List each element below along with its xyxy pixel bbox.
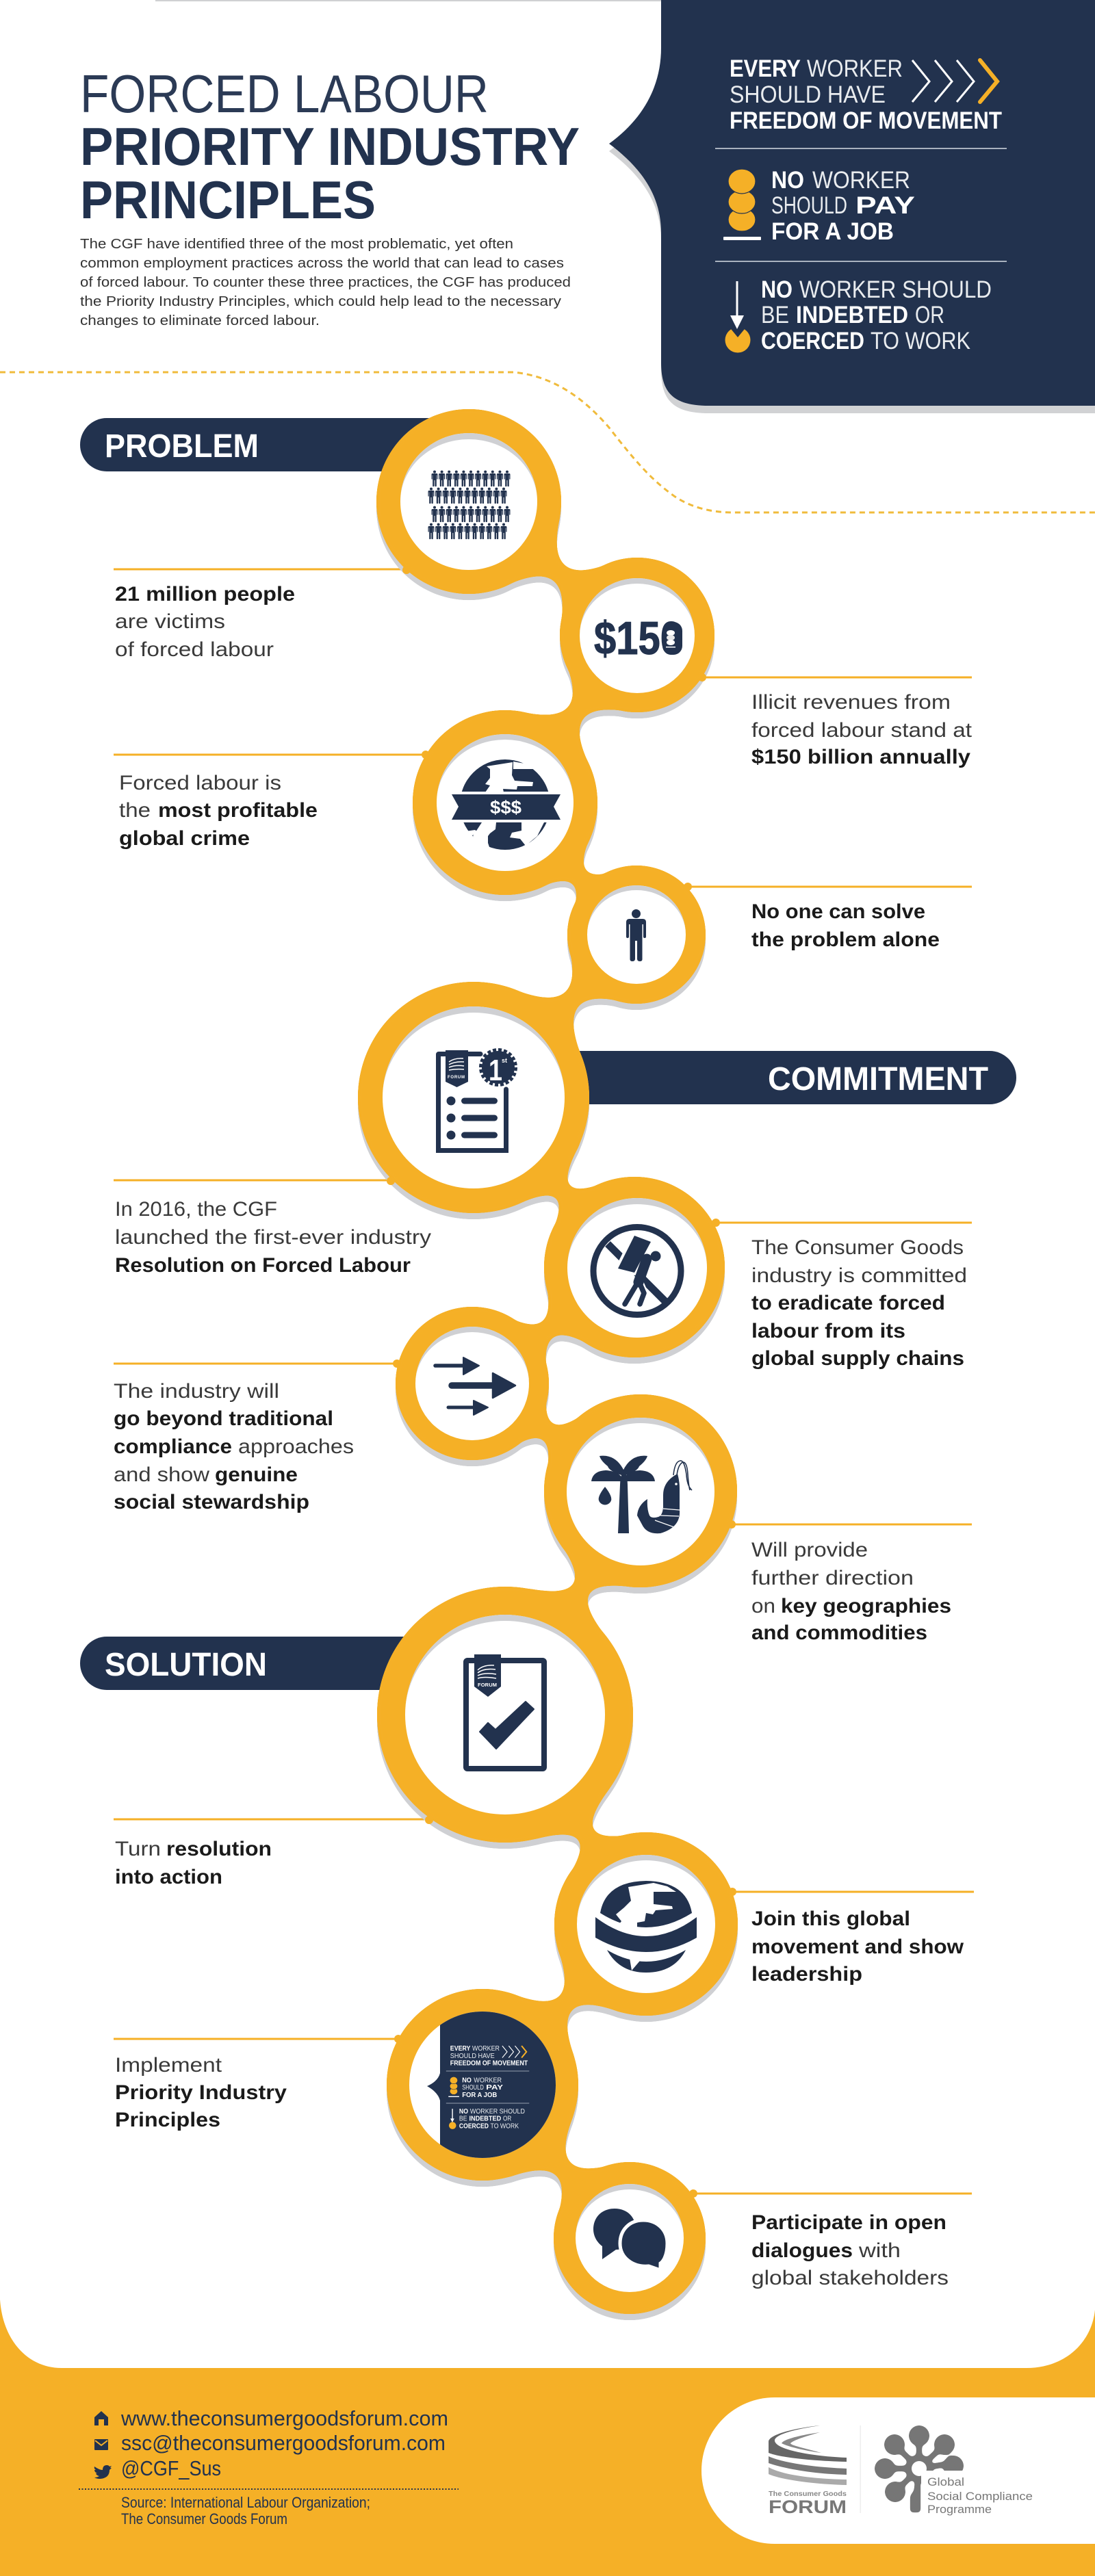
icon: miniature principles panel: FREEDOM OF MOVEMENT <box>450 2060 528 2068</box>
text: no one alone: No one can solve <box>751 900 925 923</box>
icon: miniature principles panel: NO <box>459 2108 468 2116</box>
principle: no debt: OR <box>915 302 944 328</box>
title: PRINCIPLES <box>80 170 376 230</box>
title: PRIORITY INDUSTRY <box>80 116 580 177</box>
principle: no debt: TO WORK <box>871 328 970 354</box>
text: turn resolution <box>115 1838 272 1888</box>
contact details: ssc@theconsumergoodsforum.com <box>121 2431 446 2455</box>
banner: commitment: COMMITMENT <box>768 1061 988 1097</box>
text: beyond compliance: approaches <box>238 1435 354 1458</box>
text: 2016 resolution: launched the first-ever industry <box>115 1226 431 1249</box>
text: 21 million people <box>115 583 295 661</box>
circle: open dialogues <box>576 2184 684 2292</box>
text: 21 million people: 21 million people <box>115 583 295 606</box>
text: global movement: leadership <box>751 1963 862 1986</box>
text: geographies <box>751 1539 951 1644</box>
icon: clipboard with check mark: FORUM <box>478 1682 497 1688</box>
icon: resolution document with first badge: FORUM <box>448 1076 465 1080</box>
circle: eradicate forced labour <box>567 1198 707 1338</box>
icon: miniature principles panel: SHOULD <box>462 2084 484 2092</box>
icon: miniature principles panel: OR <box>503 2116 511 2123</box>
text: 21 million people: are victims <box>115 610 225 633</box>
text: profitable crime: global crime <box>119 827 250 850</box>
principle: no debt: INDEBTED <box>796 302 908 328</box>
logo: global social compliance programme: Social Compliance <box>927 2490 1033 2503</box>
text: dialogues <box>751 2211 949 2289</box>
principle: no fees: WORKER <box>812 167 910 194</box>
banner: solution <box>80 1637 511 1690</box>
text: global movement: Join this global <box>751 1908 910 1930</box>
text: illicit revenues: Illicit revenues from <box>751 691 951 714</box>
text: profitable crime: most profitable <box>158 799 318 822</box>
text: illicit revenues <box>751 691 972 768</box>
source note <box>121 2494 370 2527</box>
logo: the consumer goods forum <box>769 2425 847 2517</box>
principle: freedom of movement <box>730 55 1002 134</box>
connector tick lines <box>114 569 974 2194</box>
principle: freedom of movement: FREEDOM OF MOVEMENT <box>730 107 1002 134</box>
panel shadow <box>609 8 1095 413</box>
text: geographies: Will provide <box>751 1539 868 1561</box>
circle: resolution document <box>383 1006 565 1188</box>
icon: $150 with coins: $150 <box>594 612 682 664</box>
text: implement: Principles <box>115 2109 220 2131</box>
text: turn resolution: into action <box>115 1866 222 1888</box>
text: implement <box>115 2054 287 2131</box>
icon: miniature principles panel: INDEBTED <box>469 2116 501 2123</box>
icon: miniature principles panel: BE <box>459 2116 467 2123</box>
icon: globe with money ribbon <box>452 759 561 850</box>
circle: no one alone <box>587 885 686 984</box>
panel background <box>609 0 1095 406</box>
principle: no fees: SHOULD <box>771 192 847 219</box>
text: eradicate: to eradicate forced <box>751 1292 945 1314</box>
intro paragraph: of forced labour. To counter these three practices, the CGF has produced <box>80 275 571 290</box>
icon: globe with band <box>595 1881 697 1973</box>
icon: miniature principles panel: FOR A JOB <box>462 2092 497 2099</box>
circle: geographies and commodities <box>567 1418 714 1565</box>
text: geographies: key geographies <box>781 1595 951 1617</box>
top edge line <box>155 0 661 1</box>
logo: the consumer goods forum: FORUM <box>769 2497 847 2517</box>
principle: no debt: BE <box>761 302 789 328</box>
icon: resolution document with first badge <box>438 1050 516 1151</box>
text: beyond compliance: social stewardship <box>114 1491 309 1513</box>
tick junction dots <box>387 566 736 2198</box>
footer <box>0 2300 1095 2576</box>
circle: profitable crime globe <box>437 734 574 871</box>
dashed route line <box>0 372 1095 512</box>
icon: miniature principles panel: WORKER <box>472 2045 500 2053</box>
contact details: www.theconsumergoodsforum.com <box>120 2406 448 2430</box>
principle: no fees: PAY <box>855 192 915 219</box>
logo: the consumer goods forum: The Consumer Goods <box>769 2490 847 2498</box>
principle: no debt: COERCED <box>761 328 864 354</box>
icon: clipboard with check mark <box>466 1654 544 1769</box>
principle: no fees <box>723 167 915 245</box>
icon: resolution document with first badge: 1 <box>489 1054 502 1087</box>
yellow chain of circles <box>358 409 738 2314</box>
text: turn resolution: resolution <box>166 1838 272 1860</box>
text: profitable crime: Forced labour is <box>119 772 281 794</box>
circle: global movement <box>577 1855 715 1993</box>
text: eradicate: The Consumer Goods <box>751 1236 964 1259</box>
icon: globe with money ribbon: $$$ <box>490 797 521 818</box>
logo: global social compliance programme: Programme <box>927 2503 992 2516</box>
text: profitable crime <box>119 772 318 850</box>
icon: prohibited forced labour <box>593 1227 681 1315</box>
principle: no fees: NO <box>771 167 804 194</box>
icon: miniature principles panel <box>427 2012 556 2158</box>
icon: miniature principles panel: TO WORK <box>491 2122 519 2130</box>
text: illicit revenues: forced labour stand at <box>751 719 972 742</box>
text: beyond compliance <box>114 1380 354 1513</box>
principle: freedom of movement: EVERY <box>730 55 801 82</box>
logo panel <box>701 2397 1095 2544</box>
icon: bird <box>94 2465 112 2479</box>
text: 2016 resolution: Resolution on Forced Labour <box>115 1254 411 1277</box>
banner: problem <box>80 418 477 471</box>
text: beyond compliance: genuine <box>215 1463 298 1486</box>
icon: miniature principles panel: WORKER <box>474 2077 502 2084</box>
text: no one alone <box>751 900 940 951</box>
chain shadow <box>358 415 738 2320</box>
principle: no fees: FOR A JOB <box>771 218 894 245</box>
contact details <box>79 2406 459 2527</box>
footer background <box>0 2300 1095 2576</box>
icon: resolution document with first badge: st <box>502 1057 507 1064</box>
intro paragraph <box>80 237 571 328</box>
logo: global social compliance programme <box>875 2425 1033 2516</box>
text: no one alone: the problem alone <box>751 928 940 951</box>
text: implement: Implement <box>115 2054 222 2077</box>
text: eradicate <box>751 1236 967 1370</box>
text: 2016 resolution <box>115 1198 431 1277</box>
text: implement: Priority Industry <box>115 2081 287 2104</box>
intro paragraph: the Priority Industry Principles, which could help lead to the necessary <box>80 294 561 309</box>
text: illicit revenues: $150 billion annually <box>751 746 970 768</box>
text: profitable crime: the <box>119 799 151 822</box>
icon: miniature principles panel: NO <box>462 2077 472 2084</box>
panel: three principles <box>609 0 1095 413</box>
contact details: @CGF_Sus <box>121 2456 221 2480</box>
circle: 21 million people <box>400 433 537 570</box>
banner: problem: PROBLEM <box>105 428 259 465</box>
text: 2016 resolution: In 2016, the CGF <box>115 1198 277 1221</box>
text: beyond compliance: and show <box>114 1463 209 1486</box>
principle: no debt: NO <box>761 276 793 303</box>
principle: no debt: WORKER SHOULD <box>799 276 992 303</box>
text: dialogues: dialogues <box>751 2239 853 2262</box>
text: turn resolution: Turn <box>115 1838 161 1860</box>
text: dialogues: Participate in open <box>751 2211 946 2234</box>
source note: The Consumer Goods Forum <box>121 2510 287 2527</box>
text: 21 million people: of forced labour <box>115 638 274 661</box>
text: beyond compliance: compliance <box>114 1435 232 1458</box>
text: eradicate: global supply chains <box>751 1347 964 1370</box>
text: dialogues: with <box>858 2239 901 2262</box>
circle: priority industry principles <box>409 2012 556 2158</box>
principle: no debt <box>725 276 992 354</box>
icon: mail <box>94 2439 108 2450</box>
icon: palm oil tree <box>591 1456 655 1533</box>
title <box>80 64 580 230</box>
text: geographies: on <box>751 1595 775 1617</box>
text: eradicate: industry is committed <box>751 1264 967 1287</box>
icon: shrimp <box>637 1461 692 1533</box>
intro paragraph: common employment practices across the world that can lead to cases <box>80 256 564 271</box>
principle: freedom of movement: SHOULD HAVE <box>730 81 886 108</box>
icon: home <box>94 2411 108 2425</box>
text: beyond compliance: The industry will <box>114 1380 279 1403</box>
text: global movement <box>751 1908 964 1986</box>
circle: $150 <box>580 578 695 693</box>
principle: freedom of movement: WORKER <box>807 55 903 82</box>
icon: single person <box>626 909 646 961</box>
source note: Source: International Labour Organization; <box>121 2494 370 2511</box>
intro paragraph: changes to eliminate forced labour. <box>80 313 320 328</box>
icon: miniature principles panel: COERCED <box>459 2122 489 2130</box>
logo: global social compliance programme: Global <box>927 2475 964 2488</box>
icon: three arrows <box>435 1357 515 1415</box>
title: FORCED LABOUR <box>80 64 489 124</box>
text: eradicate: labour from its <box>751 1320 905 1342</box>
intro paragraph: The CGF have identified three of the most problematic, yet often <box>80 237 513 252</box>
banner: commitment <box>472 1051 1016 1104</box>
icon: crowd of people <box>428 471 510 539</box>
text: global movement: movement and show <box>751 1936 964 1958</box>
circle: solution clipboard <box>405 1615 605 1814</box>
banner: solution: SOLUTION <box>105 1647 267 1683</box>
text: dialogues: global stakeholders <box>751 2267 949 2289</box>
icon: speech bubbles <box>593 2209 667 2270</box>
text: geographies: further direction <box>751 1567 914 1589</box>
icon: miniature principles panel: WORKER SHOULD <box>470 2108 525 2116</box>
text: beyond compliance: go beyond traditional <box>114 1407 333 1430</box>
icon: miniature principles panel: SHOULD HAVE <box>450 2053 495 2060</box>
text: geographies: and commodities <box>751 1622 927 1644</box>
icon: miniature principles panel: EVERY <box>450 2045 471 2053</box>
icon: miniature principles panel: PAY <box>486 2084 504 2092</box>
circle: beyond compliance <box>415 1327 529 1440</box>
